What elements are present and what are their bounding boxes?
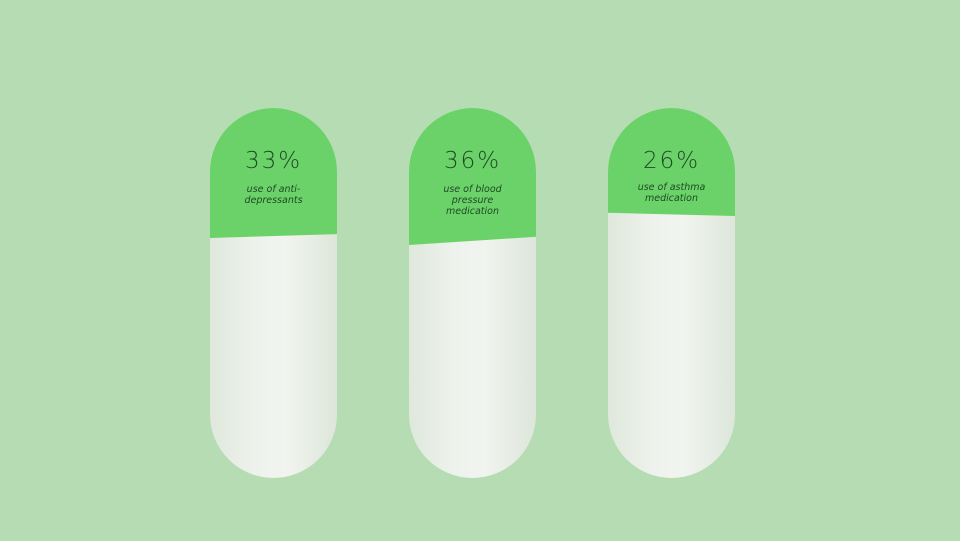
text: 36%: 36% [444, 148, 501, 174]
text: 33%: depressants [244, 195, 303, 206]
text: 26%: use of asthma [638, 182, 705, 193]
text: 36%: medication [446, 206, 499, 217]
text: 36% [443, 148, 502, 217]
text: 36%: pressure [452, 195, 493, 206]
text: 36%: use of blood [443, 184, 502, 195]
text: 33%: 33% [245, 148, 302, 174]
text: 26%: medication [645, 193, 698, 204]
green cap [608, 108, 735, 216]
text: 26% [638, 148, 705, 204]
pill: asthma [608, 108, 735, 478]
text: 33% [244, 148, 303, 206]
green cap [409, 108, 536, 245]
text: 26%: 26% [643, 148, 700, 174]
pill: antidepressants [210, 108, 337, 478]
green cap [210, 108, 337, 238]
text: 33%: use of anti- [247, 184, 300, 195]
pill: blood pressure [409, 108, 536, 478]
